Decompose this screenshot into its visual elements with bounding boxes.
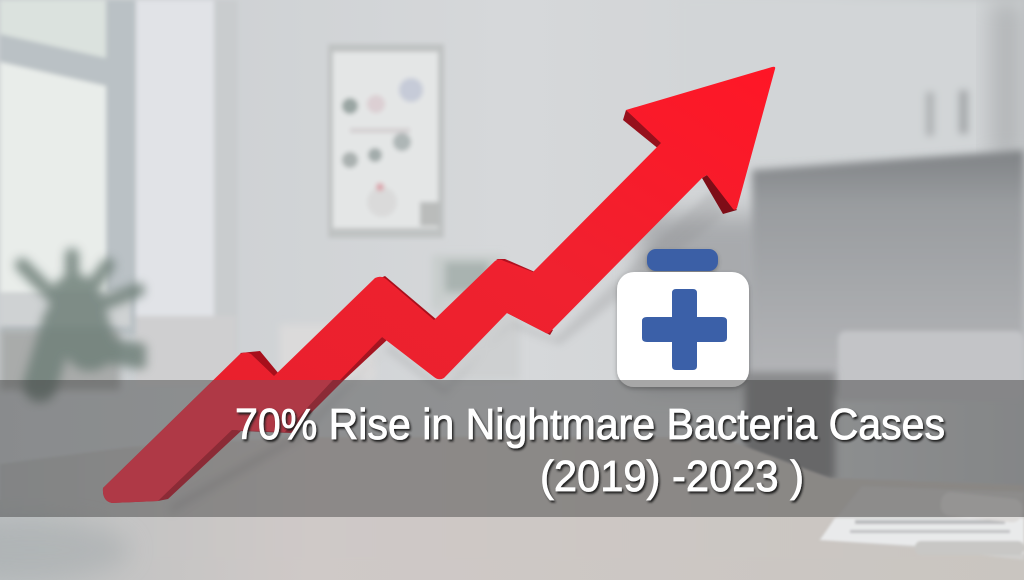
- table top: [0, 437, 1024, 560]
- arrow extruded dark sides: [240, 351, 279, 379]
- headline: 70% Rise in Nightmare Bacteria Cases: [235, 400, 945, 449]
- bottom left table shade: [0, 520, 130, 580]
- medical cross: [642, 289, 727, 370]
- arrow main body: [103, 67, 775, 503]
- upper cabinets: [680, 0, 1024, 160]
- counter block: [745, 372, 835, 480]
- first-aid medicine bottle icon: [617, 249, 749, 387]
- date range: (2019) -2023 ): [540, 452, 804, 501]
- arrow shadow on wall: [170, 190, 725, 515]
- plant: [22, 255, 140, 385]
- bottle body: [617, 272, 749, 387]
- translucent caption band: [0, 380, 1024, 517]
- table base: [0, 500, 1024, 580]
- lower right wall under cabinets: [752, 150, 1024, 395]
- headline: [235, 400, 945, 501]
- bottle cap: [647, 249, 718, 271]
- distant shelf items: [280, 255, 520, 380]
- papers and pen: [819, 486, 1024, 560]
- cabinet corner shade: [990, 0, 1024, 160]
- shade around bottle: [640, 215, 770, 385]
- window: [0, 0, 238, 386]
- sill block behind plant: [0, 330, 120, 390]
- arrow section seen through band: [102, 380, 344, 503]
- chair back: [838, 331, 1024, 401]
- red zig-zag rising arrow: [103, 67, 775, 515]
- wall poster: [328, 44, 444, 238]
